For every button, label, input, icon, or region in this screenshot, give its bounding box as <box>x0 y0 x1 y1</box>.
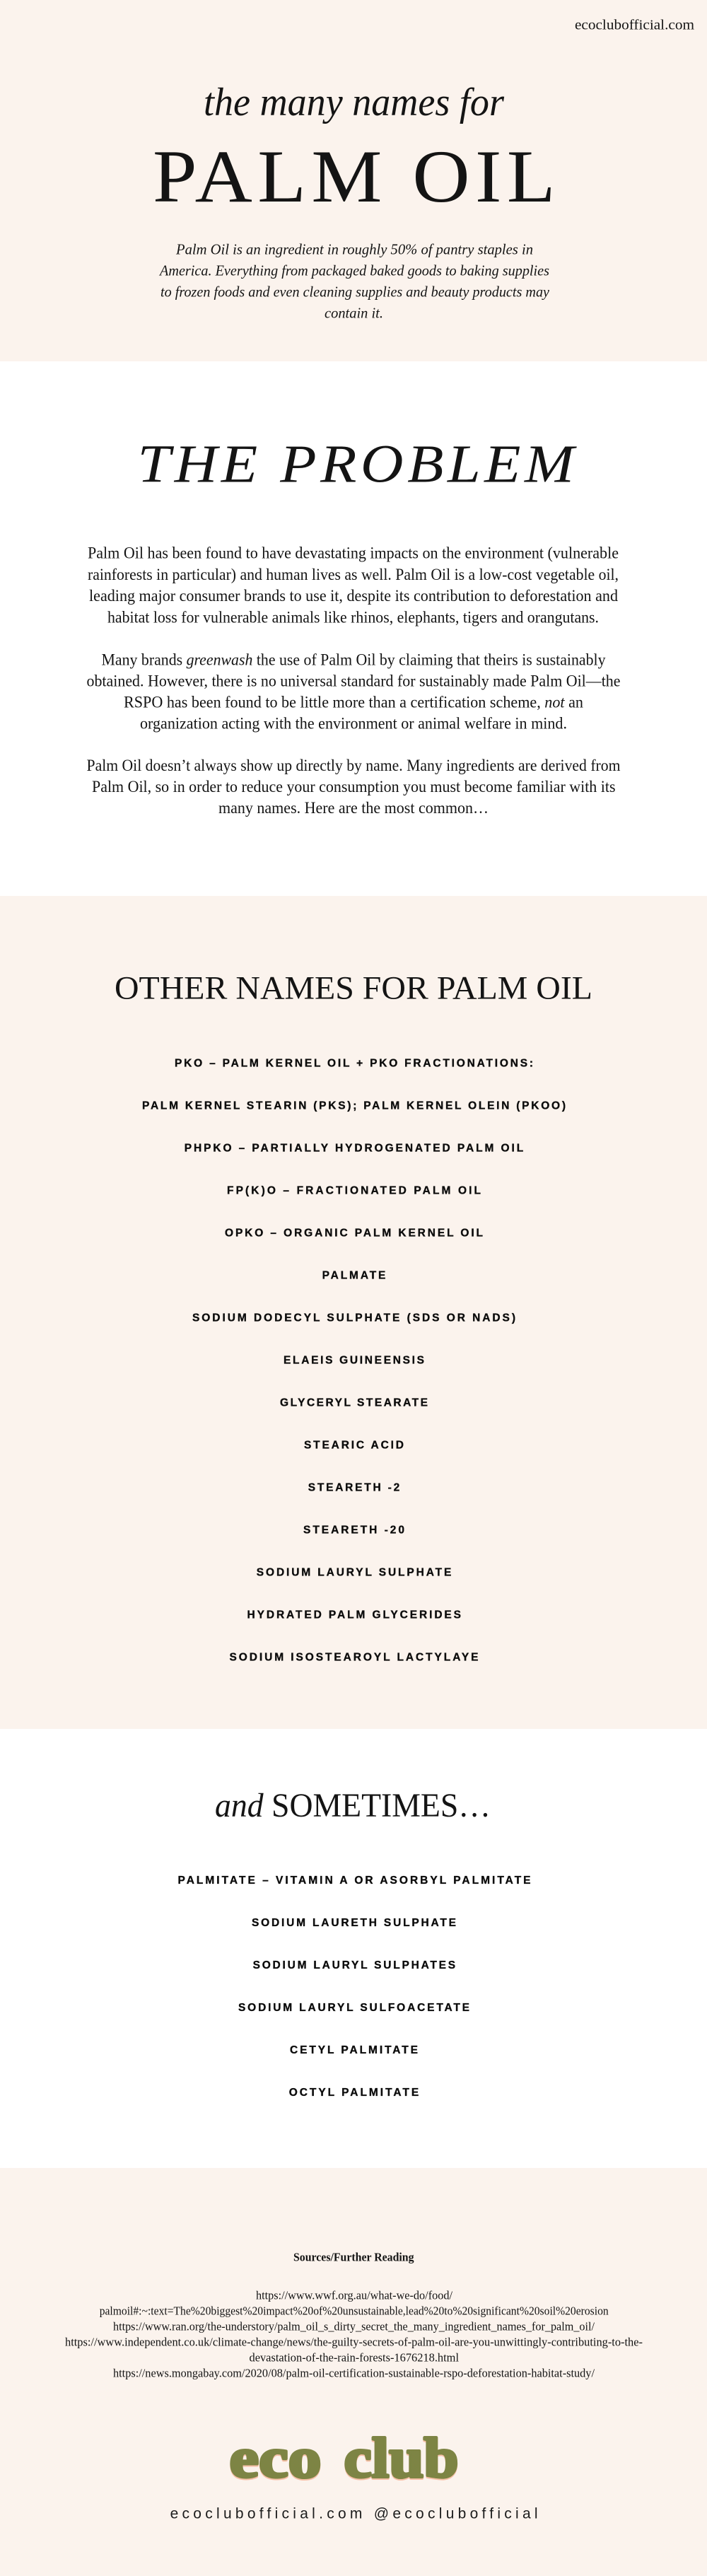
intro paragraph: to frozen foods and even cleaning supplies and beauty products may <box>160 283 550 300</box>
sources list: https://news.mongabay.com/2020/08/palm-oil-certification-sustainable-rspo-deforestation-habitat-study/ <box>113 2367 595 2380</box>
intro paragraph: contain it. <box>325 304 383 321</box>
name item: GLYCERYL STEARATE <box>280 1397 428 1409</box>
paragraph: environmental impact: leading major consumer brands to use it, despite its contribution to deforestation and <box>89 587 618 605</box>
name item: SODIUM DODECYL SULPHATE (SDS OR NADS) <box>192 1312 515 1324</box>
panel: other names for palm oil <box>0 896 707 1729</box>
paragraph: greenwashing: organization acting with the environment or animal welfare in mind. <box>140 715 567 733</box>
name item: CETYL PALMITATE <box>290 2044 418 2056</box>
name item: PKO – PALM KERNEL OIL + PKO FRACTIONATIONS: <box>175 1057 533 1069</box>
name item: OCTYL PALMITATE <box>289 2087 419 2099</box>
sources heading: Sources/Further Reading <box>293 2251 414 2264</box>
paragraph: many names: Palm Oil doesn’t always show up directly by name. Many ingredients are derived from <box>86 757 621 774</box>
paragraph: many names: many names. Here are the most common… <box>218 799 489 817</box>
name item: SODIUM LAURYL SULFOACETATE <box>238 2002 469 2014</box>
name item: SODIUM ISOSTEAROYL LACTYLAYE <box>229 1651 478 1663</box>
sources list: https://www.wwf.org.au/what-we-do/food/ <box>256 2289 452 2302</box>
panel: the problem <box>0 361 707 896</box>
logo: eco club <box>229 2428 458 2491</box>
list of sometimes names <box>178 1875 530 2099</box>
logo: eco club: club <box>344 2429 458 2491</box>
name item: PALMATE <box>322 1269 385 1281</box>
heading: the problem: THE PROBLEM <box>137 434 578 494</box>
sources list: https://www.independent.co.uk/climate-change/news/the-guilty-secrets-of-palm-oil-are-you-unwittingly-contributing-to-the- <box>65 2336 643 2349</box>
name item: STEARIC ACID <box>304 1439 404 1451</box>
paragraph: greenwashing <box>86 651 621 733</box>
name item: STEARETH -2 <box>308 1481 399 1493</box>
name item: OPKO – ORGANIC PALM KERNEL OIL <box>225 1227 483 1239</box>
paragraph: environmental impact <box>88 544 619 626</box>
intro paragraph: Palm Oil is an ingredient in roughly 50% of pantry staples in <box>175 240 533 257</box>
paragraph: environmental impact: habitat loss for vulnerable animals like rhinos, elephants, tigers and orangutans. <box>107 608 599 626</box>
paragraph: environmental impact: rainforests in particular) and human lives as well. Palm Oil is a low-cost vegetable oil, <box>88 566 619 583</box>
name item: STEARETH -20 <box>303 1524 404 1536</box>
paragraph: many names <box>86 757 621 817</box>
sources list <box>65 2289 643 2380</box>
logo: eco club: eco <box>229 2429 321 2491</box>
list of names <box>142 1057 566 1663</box>
website link: ecoclubofficial.com <box>575 17 694 33</box>
heading: other names: OTHER NAMES FOR PALM OIL <box>115 970 592 1007</box>
name item: FP(K)O – FRACTIONATED PALM OIL <box>227 1184 481 1196</box>
panel: hero <box>0 0 707 361</box>
paragraph: greenwashing: Many brands greenwash the use of Palm Oil by claiming that theirs is sustainably <box>102 651 606 669</box>
logo: eco club: eco <box>229 2428 321 2490</box>
paragraph: greenwashing: obtained. However, there is no universal standard for sustainably made Palm Oil—the <box>86 672 621 689</box>
name item: SODIUM LAURETH SULPHATE <box>252 1917 456 1929</box>
title: palm oil: PALM OIL <box>153 135 561 218</box>
footer handles: ecoclubofficial.com @ecoclubofficial <box>170 2506 538 2522</box>
paragraph: many names: Palm Oil, so in order to reduce your consumption you must become familiar with its <box>92 778 616 795</box>
title: the many names for: the many names for <box>204 81 504 124</box>
intro paragraph <box>158 240 550 321</box>
paragraph: environmental impact: Palm Oil has been found to have devastating impacts on the environment (vulnerable <box>88 544 619 562</box>
sources list: devastation-of-the-rain-forests-1676218.html <box>249 2351 459 2365</box>
name item: SODIUM LAURYL SULPHATE <box>257 1566 451 1578</box>
name item: ELAEIS GUINEENSIS <box>284 1354 424 1366</box>
name item: HYDRATED PALM GLYCERIDES <box>247 1609 461 1621</box>
intro paragraph: America. Everything from packaged baked goods to baking supplies <box>158 262 549 279</box>
panel: and sometimes <box>0 1729 707 2168</box>
sources list: https://www.ran.org/the-understory/palm_oil_s_dirty_secret_the_many_ingredient_names_for_palm_oil/ <box>113 2320 595 2333</box>
panel: sources and footer <box>0 2168 707 2576</box>
paragraph: greenwashing: RSPO has been found to be little more than a certification scheme, not an <box>124 693 583 711</box>
name item: PHPKO – PARTIALLY HYDROGENATED PALM OIL <box>185 1142 523 1154</box>
sources list: palmoil#:~:text=The%20biggest%20impact%20of%20unsustainable,lead%20to%20significant%20soil%20erosion <box>100 2304 609 2318</box>
name item: SODIUM LAURYL SULPHATES <box>253 1959 455 1971</box>
logo: eco club: club <box>344 2428 458 2490</box>
name item: PALM KERNEL STEARIN (PKS); PALM KERNEL OLEIN (PKOO) <box>142 1100 566 1112</box>
name item: PALMITATE – VITAMIN A OR ASORBYL PALMITATE <box>178 1875 530 1887</box>
heading: and sometimes: and SOMETIMES… <box>215 1787 491 1824</box>
